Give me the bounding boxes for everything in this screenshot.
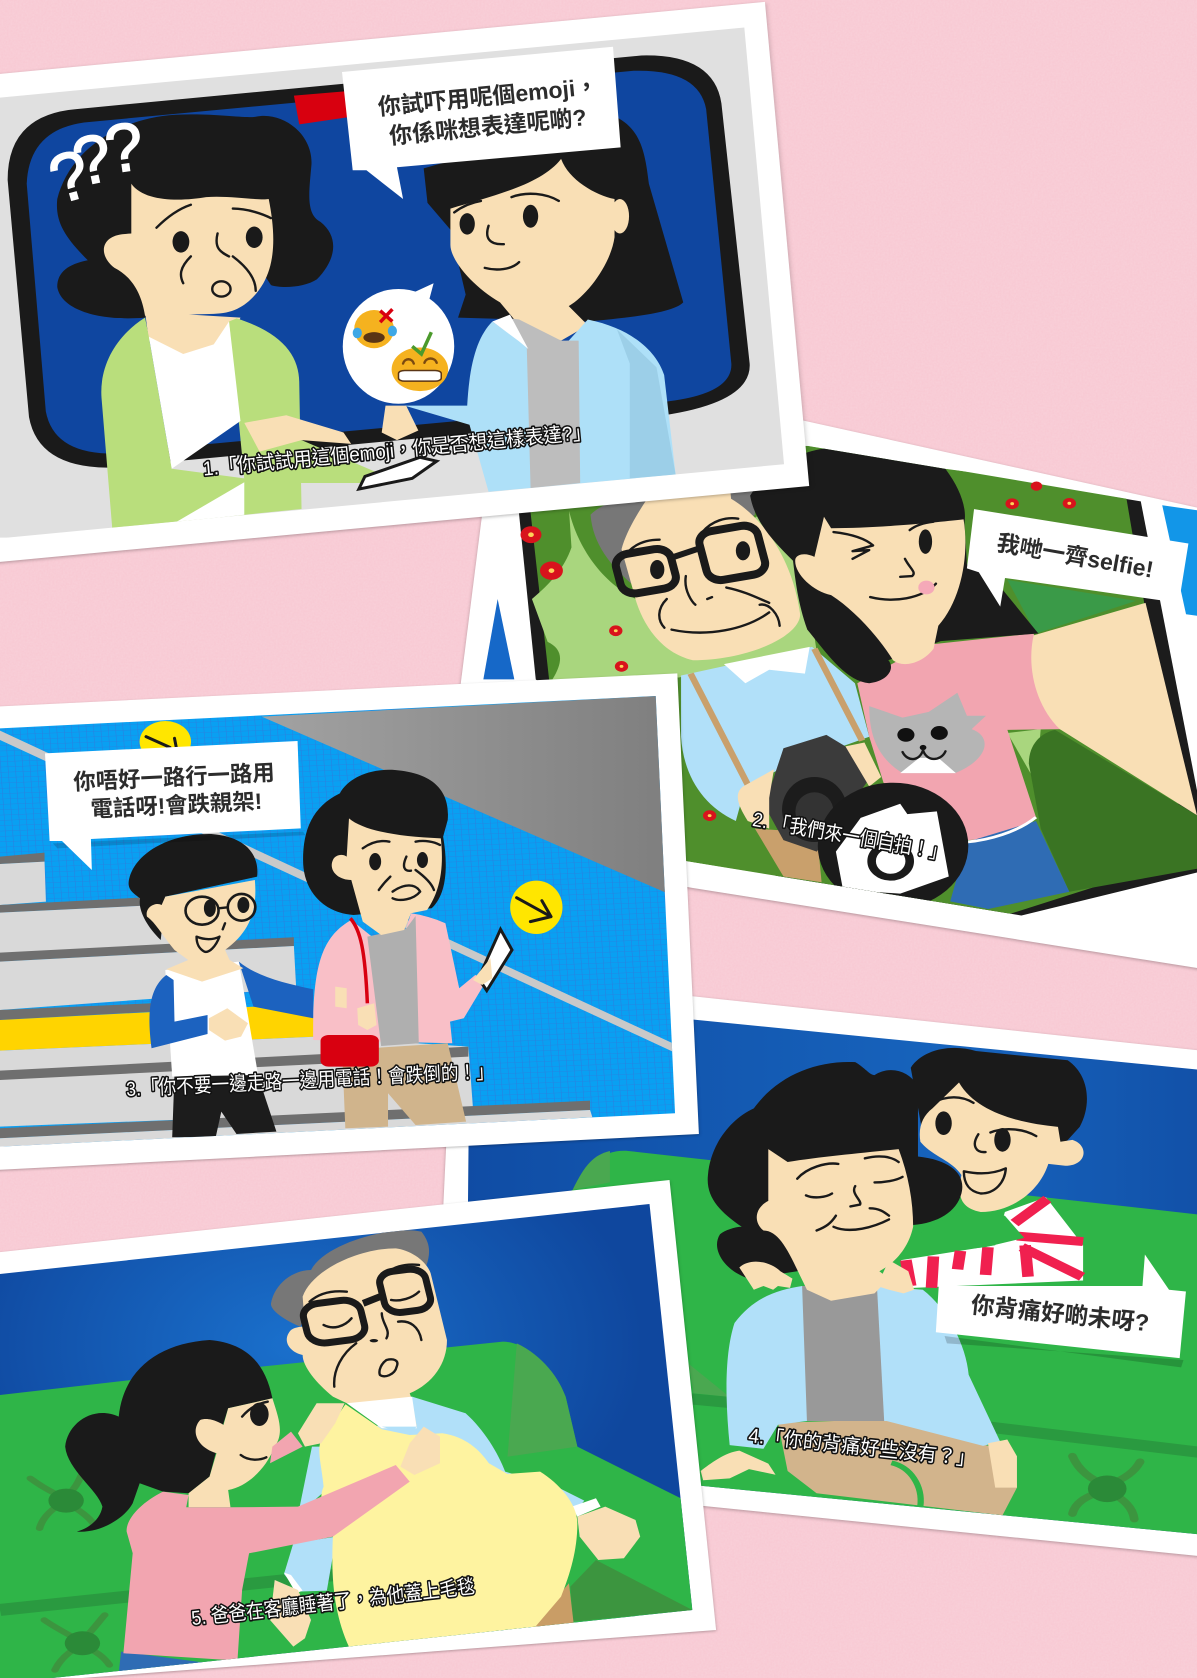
scene 4: mother and son on sofa [468, 1020, 1197, 1534]
speech bubble 1 [342, 47, 621, 199]
daughter with ponytail [65, 1340, 440, 1673]
scene 5: living room sofa [0, 1200, 698, 1678]
train window [8, 55, 750, 468]
photo frame 5 [0, 1180, 716, 1678]
photo frame 4 [430, 971, 1197, 1567]
cat on t-shirt [869, 693, 986, 773]
stairs [0, 853, 592, 1148]
sofa button upper [30, 1475, 93, 1528]
speech text 1: 你試吓用呢個emoji， [377, 73, 599, 120]
camera icon badge [818, 783, 968, 909]
caption 5: 5. 爸爸在客廳睡著了，為他蓋上毛毯 [190, 1575, 476, 1630]
caption 1: 1.「你試試用這個emoji，你是否想這樣表達?」 [202, 420, 592, 481]
son [891, 1048, 1087, 1288]
emoji: crying laugh, crossed out [353, 309, 397, 348]
sleeping father [270, 1230, 640, 1647]
daughter: body [857, 633, 1062, 840]
speech text 1: 你係咪想表達呢啲? [388, 104, 588, 149]
photo frame 3 [0, 673, 699, 1170]
speech bubble 4 [936, 1255, 1186, 1367]
yellow arrow sign upper [140, 721, 191, 762]
panel: photo 3, warning about phone on stairs [0, 673, 699, 1170]
daughter: hair and head [750, 448, 1038, 683]
handrail [0, 731, 673, 1052]
mother with phone [303, 770, 512, 1128]
speech text 3: 你唔好一路行一路用 [73, 760, 275, 795]
father: head [590, 491, 755, 584]
yellow blanket [319, 1404, 577, 1647]
panel: photo 4, asking about back pain [421, 971, 1197, 1567]
speech bubble 3 [45, 741, 305, 870]
panel: photo 2, selfie with father [459, 420, 1197, 971]
panel: photo 5, covering father with blanket [0, 1180, 716, 1678]
question marks: ? [66, 119, 119, 201]
speech bubble 2 [967, 509, 1188, 607]
sofa button lower [44, 1615, 109, 1670]
question marks: ? [100, 108, 148, 188]
scene 2: garden seen through camera screen [483, 396, 1197, 917]
scene 1: train window [0, 23, 794, 543]
phone [359, 457, 437, 489]
question marks [41, 108, 148, 219]
mother [701, 1062, 1017, 1515]
daughter explaining [382, 115, 683, 492]
photo frame 2 [440, 354, 1197, 986]
speech text 4: 你背痛好啲未呀? [970, 1292, 1150, 1336]
yellow arrow sign [510, 881, 563, 934]
caption 3: 3.「你不要一邊走路一邊用電話！會跌倒的！」 [126, 1060, 494, 1101]
speech text 3: 電話呀!會跌親架! [90, 789, 263, 822]
flowers [521, 482, 1076, 821]
photo frame 1 [0, 2, 809, 563]
camera on strap [764, 735, 869, 852]
caption 2: 2. 「我們來一個自拍！」 [751, 808, 949, 865]
sofa button [1072, 1456, 1140, 1519]
boy [129, 834, 313, 1137]
confused mother [57, 114, 382, 528]
emoji thought bubble [343, 283, 454, 404]
panel: photo 1, asking about emoji on train [0, 2, 809, 563]
caption 4: 4.「你的背痛好些沒有？」 [747, 1424, 977, 1471]
scene 3: station stairs [0, 687, 689, 1153]
speech text 2: 我哋一齊selfie! [995, 529, 1155, 583]
father: shirt and strap [681, 647, 869, 821]
emoji: grinning teeth, ticked [392, 332, 448, 391]
question marks: ? [41, 135, 98, 219]
